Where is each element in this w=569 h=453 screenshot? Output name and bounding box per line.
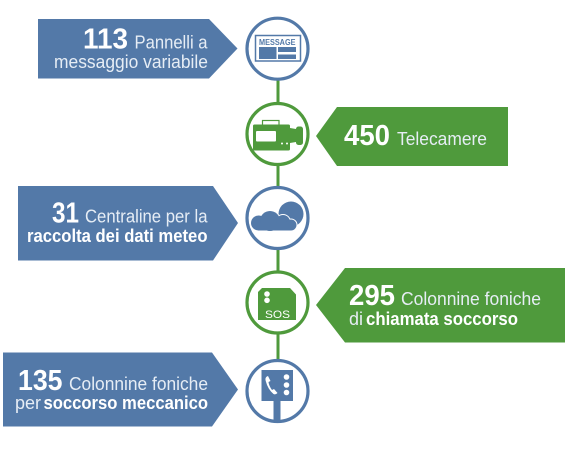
panel: 135 colonnine soccorso meccanico: per xyxy=(15,393,41,413)
panel: 113 pannelli a messaggio variabile: 113 xyxy=(83,24,128,56)
timeline connector xyxy=(276,78,280,363)
panel: 31 centraline: Centraline per la xyxy=(85,206,208,226)
panel: 113 pannelli a messaggio variabile xyxy=(38,19,238,78)
icon: clouds xyxy=(247,188,308,248)
panel: 295 colonnine chiamata soccorso: Colonnine foniche xyxy=(401,289,541,309)
icon: emergency telephone column xyxy=(247,360,308,422)
panel: 295 colonnine chiamata soccorso: chiamata soccorso xyxy=(366,309,518,329)
panel: 450 telecamere: 450 xyxy=(344,120,390,152)
panel: 113 pannelli a messaggio variabile: messaggio variabile xyxy=(54,52,208,72)
panel: 295 colonnine chiamata soccorso xyxy=(316,268,565,342)
icon: SOS column: SOS xyxy=(265,309,290,321)
panel: 135 colonnine soccorso meccanico: 135 xyxy=(18,365,62,397)
icon: SOS column xyxy=(247,272,308,333)
icon: message panel: MESSAGE xyxy=(259,37,296,47)
panel: 31 centraline xyxy=(18,186,238,260)
panel: 113 pannelli a messaggio variabile: Pannelli a xyxy=(134,32,208,52)
panel: 450 telecamere: Telecamere xyxy=(397,129,487,149)
panel: 31 centraline: raccolta dei dati meteo xyxy=(27,226,208,246)
panel: 135 colonnine soccorso meccanico xyxy=(3,352,238,426)
icon: video camera xyxy=(247,104,308,164)
panel: 295 colonnine chiamata soccorso: 295 xyxy=(349,280,395,312)
icon: message panel xyxy=(247,18,308,79)
panel: 450 telecamere xyxy=(316,107,508,166)
panel: 135 colonnine soccorso meccanico: Colonnine foniche xyxy=(69,374,208,394)
panel: 135 colonnine soccorso meccanico: soccorso meccanico xyxy=(44,393,208,413)
panel: 295 colonnine chiamata soccorso: di xyxy=(349,309,363,329)
panel: 31 centraline: 31 xyxy=(52,198,79,230)
